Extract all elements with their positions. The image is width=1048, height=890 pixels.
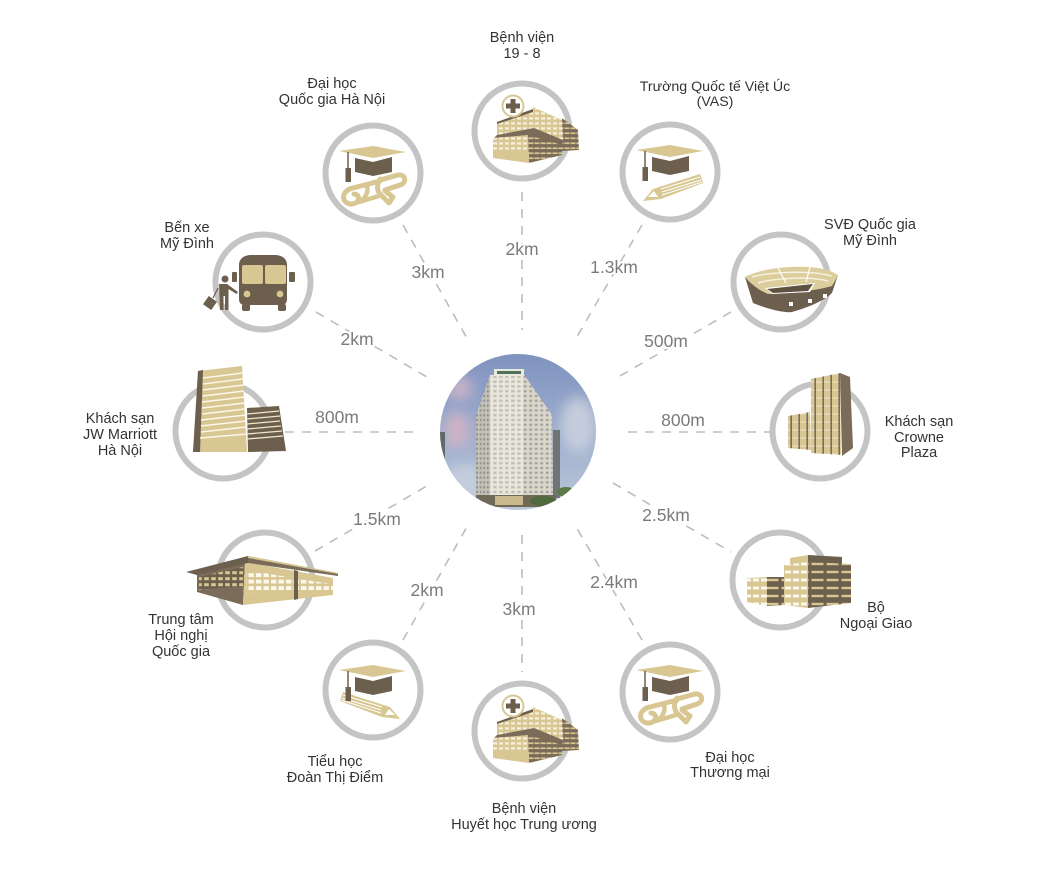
distance: 500m: 500m	[644, 331, 688, 351]
label: Bến xe Mỹ Đình: Bến xe	[164, 220, 210, 236]
node: Khách sạn Crowne Plaza	[772, 373, 868, 478]
node: Trung tâm Hội nghị Quốc gia	[186, 532, 338, 628]
label: Trường Quốc tế Việt Úc: Trường Quốc tế Việt Úc	[640, 78, 790, 95]
distance: 3km bottom: 3km	[502, 599, 536, 619]
label: Đại học Quốc gia Hà Nội: Quốc gia Hà Nội	[279, 92, 385, 108]
label: Khách sạn JW Marriott Hà Nội: JW Marriott	[83, 427, 157, 443]
label: Bệnh viện Huyết học Trung ương: Huyết học Trung ương	[451, 817, 597, 833]
distance: 800m right: 800m	[661, 410, 705, 430]
node: Bệnh viện 19-8	[474, 84, 579, 178]
distance: 2km lower left: 2km	[410, 580, 444, 600]
distance: 2.5km: 2.5km	[642, 505, 690, 525]
label: Bệnh viện 19-8: 19 - 8	[503, 46, 541, 62]
label: Trung tâm Hội nghị Quốc gia: Trung tâm	[148, 612, 214, 628]
label: Khách sạn JW Marriott Hà Nội: Khách sạn	[86, 411, 154, 427]
label: Tiểu học Đoàn Thị Điểm: Đoàn Thị Điểm	[287, 770, 383, 786]
node: Đại học Thương mại	[622, 644, 718, 740]
distance: 2km top: 2km	[505, 239, 539, 259]
label: Đại học Quốc gia Hà Nội: Đại học	[307, 76, 357, 92]
label: Đại học Thương mại: Thương mại	[690, 765, 770, 781]
label: Khách sạn Crowne Plaza: Plaza	[901, 445, 938, 461]
label: Bến xe Mỹ Đình: Mỹ Đình	[160, 236, 214, 252]
central building photo	[440, 354, 596, 510]
label: SVĐ Quốc gia Mỹ Đình: SVĐ Quốc gia	[824, 217, 917, 233]
label: Bệnh viện 19-8: Bệnh viện	[490, 30, 554, 46]
label: Bộ Ngoại Giao: Ngoại Giao	[840, 616, 912, 632]
distance: 3km upper left: 3km	[411, 262, 445, 282]
distance: 1.5km: 1.5km	[353, 509, 401, 529]
node: Tiểu học Đoàn Thị Điểm	[326, 642, 420, 738]
label: Bộ Ngoại Giao: Bộ	[867, 600, 885, 616]
label: Tiểu học Đoàn Thị Điểm: Tiểu học	[307, 754, 363, 770]
label: Khách sạn Crowne Plaza: Khách sạn	[885, 414, 953, 430]
node: SVĐ Quốc gia Mỹ Đình	[734, 234, 838, 330]
node: Đại học Quốc gia Hà Nội	[326, 126, 420, 220]
node: Khách sạn JW Marriott Hà Nội	[176, 366, 286, 478]
node: Trường Quốc tế Việt Úc	[622, 124, 718, 220]
distance: 800m left: 800m	[315, 407, 359, 427]
node: Bến xe Mỹ Đình	[203, 234, 310, 330]
label: Đại học Thương mại: Đại học	[705, 750, 755, 766]
dashed connector lines	[285, 192, 770, 672]
label: Khách sạn JW Marriott Hà Nội: Hà Nội	[98, 443, 142, 459]
node: Bộ Ngoại Giao	[732, 532, 851, 628]
label: Trung tâm Hội nghị Quốc gia: Hội nghị	[154, 628, 208, 644]
label: SVĐ Quốc gia Mỹ Đình: Mỹ Đình	[843, 233, 897, 249]
label: Bệnh viện Huyết học Trung ương: Bệnh viện	[492, 801, 556, 817]
label: Khách sạn Crowne Plaza: Crowne	[894, 430, 944, 446]
distance: 1.3km: 1.3km	[590, 257, 638, 277]
distance: 2.4km: 2.4km	[590, 572, 638, 592]
label: Trung tâm Hội nghị Quốc gia: Quốc gia	[152, 644, 211, 660]
distance: 2km bus station: 2km	[340, 329, 374, 349]
node: Bệnh viện Huyết học Trung ương	[474, 684, 579, 778]
label: Trường Quốc tế Việt Úc: (VAS)	[697, 94, 733, 110]
